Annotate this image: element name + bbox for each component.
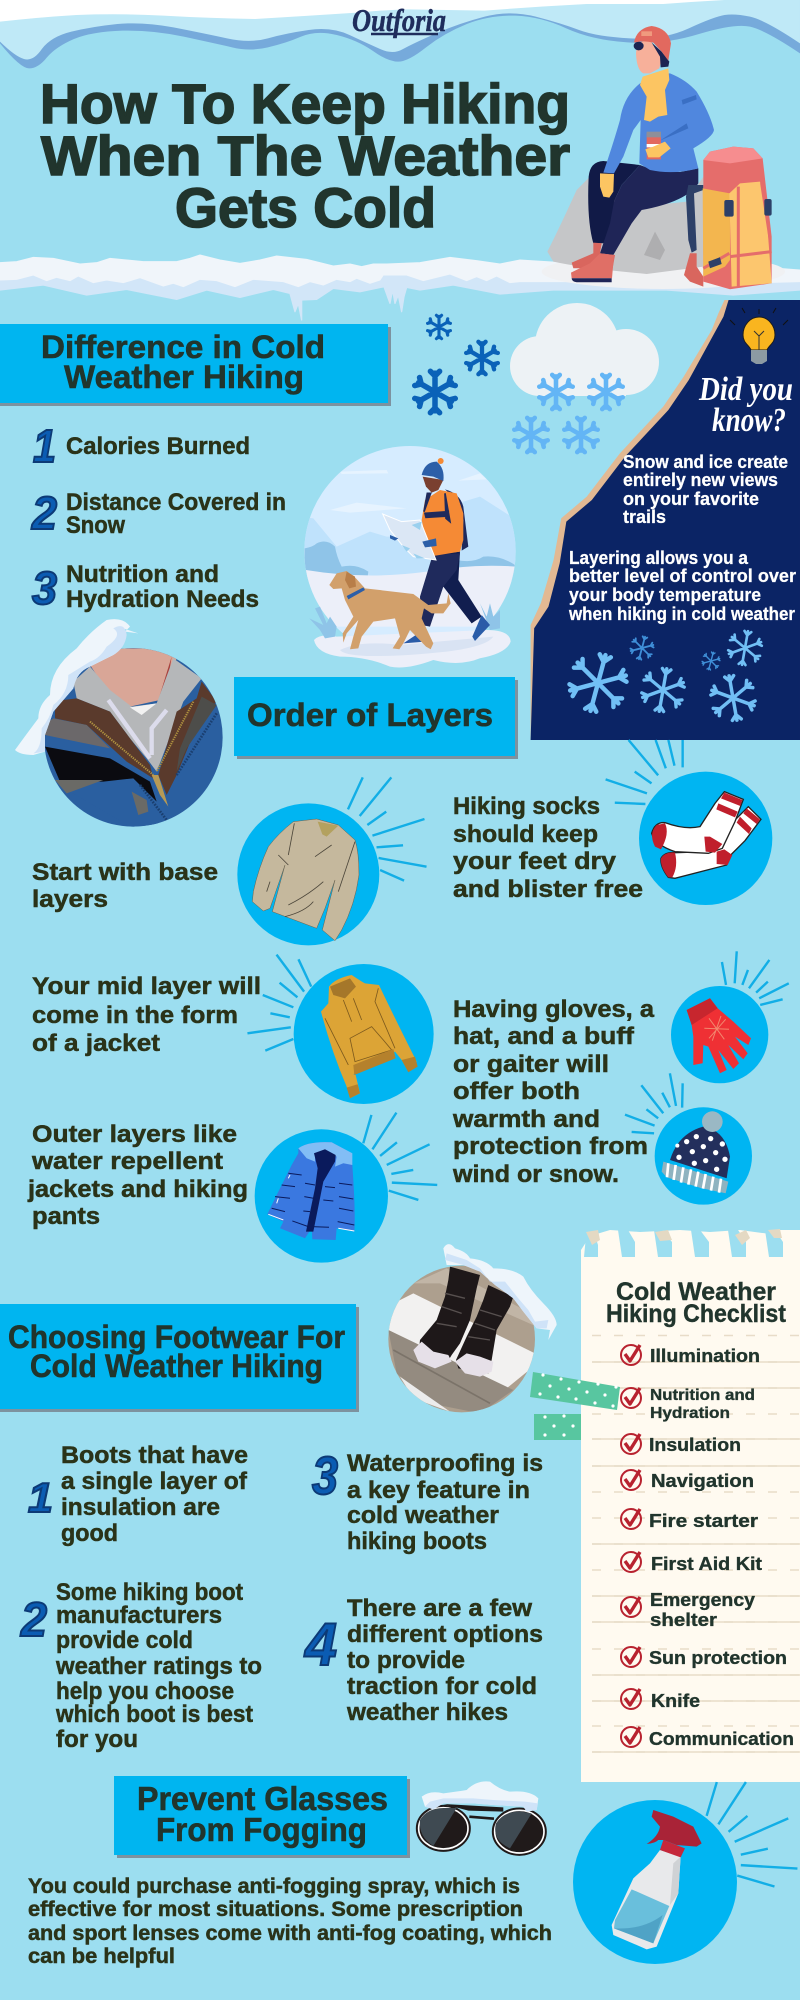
icon: base layer shirt [237,803,379,945]
hiker with backpack on rock [542,26,785,289]
item: knife [621,1689,700,1711]
heading: difference in cold weather hiking [0,324,391,406]
prevent fogging paragraph: can be helpful [28,1945,175,1968]
rays [247,955,311,1051]
layer: gloves and hat: or gaiter will [453,1051,609,1078]
footwear tip 1: Boots that have [61,1442,248,1469]
layer: mid layer [32,955,434,1104]
item: first aid kit [621,1552,762,1574]
photo: boots in snow [387,1244,557,1413]
item: nutrition and hydration: Nutrition and [650,1387,755,1404]
layer: base layer: layers [32,886,108,913]
item: nutrition and hydration [621,1387,755,1422]
footwear tip 2: 2 [20,1594,47,1647]
footwear tip 2: provide cold [56,1627,193,1654]
fact: snow and ice: on your favorite [623,489,759,509]
layer: outer layer [27,1113,437,1263]
item 2: Distance Covered in [66,489,286,516]
footwear tip 3: 3 [312,1446,338,1506]
footwear tip 3: Waterproofing is [347,1450,543,1477]
item: insulation [621,1434,741,1455]
icon: puffer jacket [255,1129,388,1263]
item: navigation: Navigation [651,1471,754,1491]
footwear tip 3: a key feature in [347,1477,530,1504]
footwear tip 2: for you [56,1726,138,1753]
item: first aid kit: First Aid Kit [651,1554,762,1574]
layer: gloves and hat: warmth and [452,1106,600,1133]
heading: prevent glasses from fogging: From Fogging [156,1811,367,1848]
ruled lines [592,1336,800,1752]
title: Gets Cold [175,176,436,239]
checklist title: Hiking Checklist [606,1300,787,1328]
rays [625,1073,683,1133]
item 1 [33,420,250,472]
heading: choosing footwear: Cold Weather Hiking [30,1348,323,1384]
layer: socks: and blister free [453,876,643,903]
layer: mid layer: Your mid layer will [32,973,261,1000]
layer: mid layer: come in the form [32,1002,238,1029]
icon: beanie [655,1107,752,1205]
layer: gloves and hat [452,951,789,1205]
layer: outer layer: jackets and hiking [27,1176,248,1203]
footwear tip 4 [304,1595,543,1726]
layer: socks [453,740,772,905]
item: communication: Communication [649,1729,794,1749]
fact: snow and ice: Snow and ice create [623,452,788,472]
footwear tip 4: traction for cold [347,1673,537,1700]
title [40,72,570,239]
layer: outer layer: pants [32,1203,100,1230]
top snow waves [0,0,800,68]
item 1: Calories Burned [66,433,250,460]
item 2 [31,487,286,539]
icon: sunglasses with snow [417,1781,546,1855]
fact: snow and ice: entirely new views [623,470,778,490]
footwear tip 3: cold weather [347,1502,499,1529]
layer: base layer [32,777,427,945]
footwear tip 3 [312,1446,543,1555]
panel: did you know [531,300,800,740]
layer: socks: Hiking socks [453,793,600,820]
item 1: 1 [33,420,56,472]
rays [363,1113,437,1200]
item: emergency shelter: shelter [650,1610,717,1630]
fact: layering: Layering allows you a [569,548,749,568]
layer: base layer: Start with base [32,859,218,886]
fact: snow and ice [623,452,788,527]
item: illumination [621,1345,760,1366]
title: When The Weather [41,124,570,187]
prevent fogging paragraph: and sport lenses come with anti-fog coating, which [28,1922,552,1945]
footwear tip 4: 4 [304,1611,337,1678]
torn navy panel [531,300,800,740]
layer: outer layer: Outer layers like [32,1121,237,1148]
heading: difference in cold weather hiking: Difference in Cold [41,329,325,365]
layer: gloves and hat: Having gloves, a [453,996,655,1023]
prevent fogging paragraph [28,1875,552,1968]
heading: prevent glasses from fogging [114,1776,410,1858]
footwear tip 4: to provide [347,1647,465,1674]
item 3: Nutrition and [66,561,219,588]
layer: gloves and hat: offer both [453,1078,580,1105]
rays [722,951,789,1005]
fact: layering [568,548,796,624]
icon: socks [639,772,772,905]
panel snowflakes [564,628,764,724]
item: knife: Knife [651,1691,700,1711]
checklist title: Cold Weather [616,1278,776,1306]
washi tape [530,1372,620,1440]
footwear tip 1 [28,1442,248,1547]
heading: choosing footwear: Choosing Footwear For [8,1319,345,1355]
item 2: 2 [31,487,57,539]
icon: spray bottle [573,1782,797,1964]
footwear tip 2: manufacturers [56,1602,222,1629]
fact: layering: your body temperature [569,585,761,605]
icon: glove [671,986,768,1083]
item: emergency shelter [621,1590,755,1630]
footwear tip 4: weather hikes [346,1699,508,1726]
rays [606,740,683,804]
heading: choosing footwear [0,1304,359,1412]
icon: hoodie [294,964,434,1104]
icon: lightbulb [730,308,788,364]
item 2: Snow [66,512,125,539]
footwear tip 2: which boot is best [55,1701,253,1728]
item: illumination: Illumination [650,1346,760,1366]
layer: gloves and hat: hat, and a buff [453,1023,635,1050]
footwear tip 1: insulation are [61,1494,220,1521]
item 3 [32,561,259,614]
logo: Outforia: Outforia [352,2,446,38]
footwear tip 4: different options [347,1621,543,1648]
footwear tip 2 [20,1579,262,1753]
checklist title [606,1278,787,1328]
fact: snow and ice: trails [623,507,666,527]
heading: order of layers [234,677,518,759]
item 3: 3 [32,562,57,614]
item: sun protection: Sun protection [649,1648,787,1668]
prevent fogging paragraph: You could purchase anti-fogging spray, which is [28,1875,520,1898]
snow ledge [0,255,800,320]
footwear tip 4: There are a few [347,1595,532,1622]
item: emergency shelter: Emergency [650,1590,755,1610]
footwear tip 2: weather ratings to [55,1653,262,1680]
heading: order of layers: Order of Layers [247,697,493,733]
layer: gloves and hat: wind or snow. [452,1161,619,1188]
item: insulation: Insulation [649,1435,741,1455]
footwear tip 1: good [61,1520,118,1547]
heading: difference in cold weather hiking: Weather Hiking [64,359,304,395]
torn tabs [584,1230,783,1257]
layer: socks: your feet dry [453,848,617,875]
heading: prevent glasses from fogging: Prevent Glasses [137,1780,388,1817]
footwear tip 2: Some hiking boot [56,1579,243,1606]
numbered list: differences [31,420,286,614]
layer: gloves and hat: protection from [453,1133,648,1160]
footwear tip 2: help you choose [56,1678,234,1705]
cloud with snowflakes [415,303,659,452]
item: navigation [621,1470,754,1491]
footwear tip 1: 1 [28,1474,53,1521]
layer: outer layer: water repellent [31,1148,223,1175]
did you know heading [698,371,793,439]
item: fire starter [621,1509,758,1531]
fact: layering: better level of control over [569,566,796,586]
illustration: hiker and dog in snow [300,446,517,667]
photo: layered jacket with snow [15,619,225,828]
checklist paper [581,1229,800,1782]
footwear tip 3: hiking boots [347,1528,487,1555]
item: fire starter: Fire starter [649,1511,758,1531]
layer: socks: should keep [453,821,598,848]
prevent fogging paragraph: effective for most situations. Some prescription [28,1898,523,1921]
rays [348,777,427,881]
item 3: Hydration Needs [66,586,259,613]
footwear tip 1: a single layer of [61,1468,248,1495]
title: How To Keep Hiking [40,72,570,135]
item: nutrition and hydration: Hydration [650,1405,730,1422]
layer: mid layer: of a jacket [32,1030,160,1057]
